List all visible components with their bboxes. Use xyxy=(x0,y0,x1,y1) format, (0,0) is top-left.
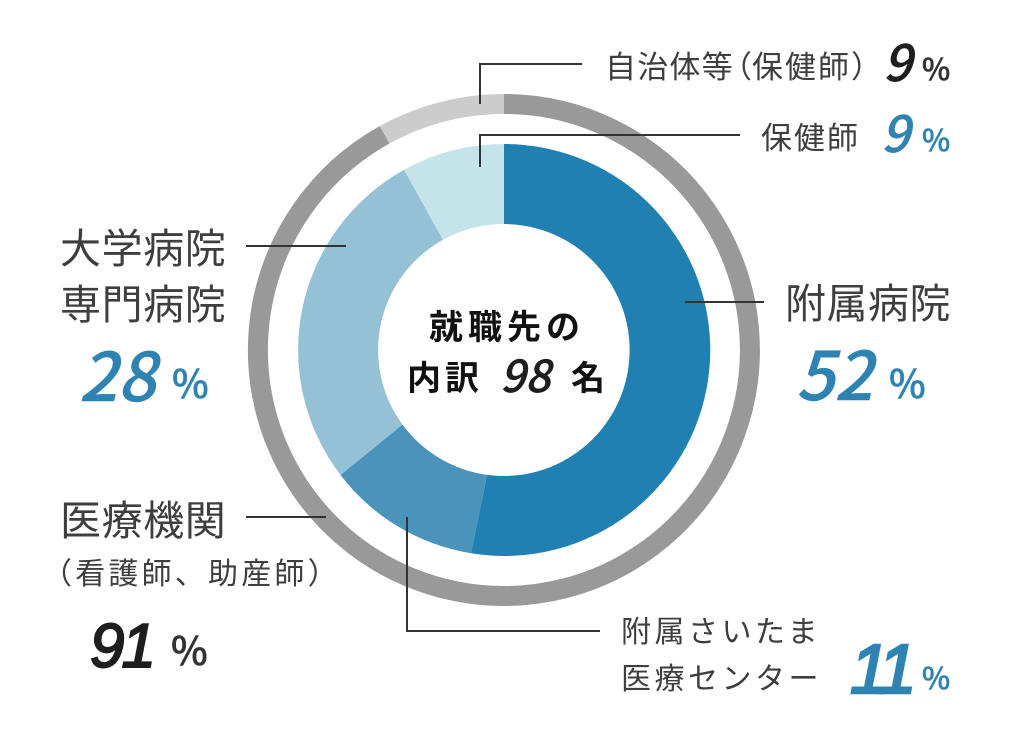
label: municipal 9%: 自治体等 xyxy=(605,42,734,87)
outer ring chart xyxy=(258,104,750,596)
label: medical institutions 91%: 医療機関 xyxy=(60,487,226,547)
center label: 名 xyxy=(571,351,605,400)
label: affiliated saitama medical center 11% xyxy=(621,607,950,708)
label: affiliated hospital 52%: 附属病院 xyxy=(785,270,951,330)
leader lines xyxy=(246,64,764,631)
label: public health nurse 9% xyxy=(761,95,950,167)
label: municipal 9%: % xyxy=(922,45,950,89)
label: municipal 9%: 保健師 xyxy=(752,42,851,87)
label: affiliated saitama medical center 11%: 11 xyxy=(850,630,912,708)
label: municipal 9%: ） xyxy=(851,42,882,87)
label: affiliated saitama medical center 11%: % xyxy=(922,654,950,698)
inner donut chart xyxy=(298,144,710,556)
label: university hospital 28%: % xyxy=(172,354,209,410)
label: university hospital 28%: 大学病院 xyxy=(60,215,226,275)
label: medical institutions 91%: （看護師、助産師） xyxy=(42,549,341,593)
label: medical institutions 91% xyxy=(42,487,341,681)
label: medical institutions 91%: 91 xyxy=(90,612,153,681)
label: public health nurse 9%: % xyxy=(922,116,950,160)
label: affiliated hospital 52% xyxy=(785,270,951,420)
center label: 就職先の xyxy=(429,300,585,349)
label: university hospital 28%: 専門病院 xyxy=(60,271,226,331)
center label: 98 xyxy=(500,341,555,405)
label: university hospital 28% xyxy=(60,215,226,421)
label: affiliated saitama medical center 11%: 附属さいたま xyxy=(621,607,821,651)
label: university hospital 28%: 28 xyxy=(79,324,162,421)
center label: 内訳 xyxy=(407,351,483,400)
label: affiliated hospital 52%: % xyxy=(889,354,926,410)
label: medical institutions 91%: % xyxy=(171,621,208,677)
label: affiliated saitama medical center 11%: 医療センター xyxy=(621,654,822,698)
label: public health nurse 9%: 保健師 xyxy=(761,113,860,158)
label: municipal 9%: （ xyxy=(721,42,752,87)
center label xyxy=(407,300,605,405)
label: public health nurse 9%: 9 xyxy=(881,95,915,167)
label: municipal 9% xyxy=(605,24,950,96)
label: affiliated hospital 52%: 52 xyxy=(796,323,878,420)
label: municipal 9%: 9 xyxy=(883,24,917,96)
